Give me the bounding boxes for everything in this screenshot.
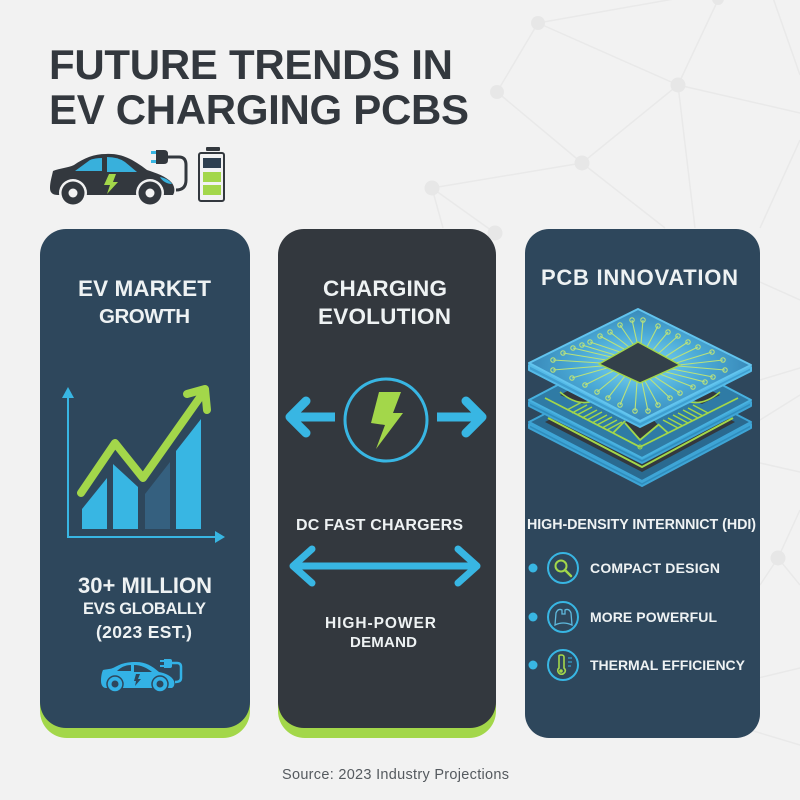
heading: PCB innovation: PCB INNOVATION xyxy=(541,265,738,290)
chip xyxy=(599,342,680,383)
heading: EV market growth xyxy=(78,276,211,328)
label: DC fast chargers: DC FAST CHARGERS xyxy=(296,517,463,534)
list item: thermal efficiency xyxy=(528,650,746,680)
statistic: 30+ million EVs: 30+ MILLION xyxy=(78,573,212,598)
statistic: 30+ million EVs xyxy=(78,573,212,642)
panel: EV market growth xyxy=(40,229,250,738)
label: high-power demand xyxy=(325,615,436,651)
top layer xyxy=(529,309,751,427)
label: HDI: HIGH-DENSITY INTERNNICT (HDI) xyxy=(527,517,756,533)
arrow: two-way xyxy=(293,549,477,583)
title: FUTURE TRENDS IN xyxy=(49,41,453,88)
panel: PCB innovation xyxy=(525,229,760,738)
bar chart: rising trend xyxy=(62,387,225,543)
icon: blue electric car xyxy=(101,659,181,692)
list item: more powerful xyxy=(528,602,717,632)
heading: EV market growth: GROWTH xyxy=(99,305,190,328)
heading: EV market growth: EV MARKET xyxy=(78,276,211,301)
label: high-power demand: HIGH-POWER xyxy=(325,615,436,632)
list item: compact design: COMPACT DESIGN xyxy=(590,560,720,576)
title: EV CHARGING PCBS xyxy=(49,86,469,133)
statistic: 30+ million EVs: EVS GLOBALLY xyxy=(83,600,206,618)
icon: lightning bolt with outward arrows xyxy=(290,379,482,461)
illustration: layered PCB stack xyxy=(529,309,751,486)
bottom layer xyxy=(529,365,751,486)
source note: Source: 2023 Industry Projections xyxy=(282,767,509,783)
traces xyxy=(551,318,727,413)
title xyxy=(49,41,469,133)
panel: charging evolution xyxy=(278,229,496,738)
label: high-power demand: DEMAND xyxy=(350,634,417,651)
heading: charging evolution: EVOLUTION xyxy=(318,304,451,329)
statistic: 30+ million EVs: (2023 EST.) xyxy=(96,622,192,642)
list item: compact design xyxy=(528,553,720,583)
middle layer xyxy=(529,342,751,463)
icon: car with plug and battery xyxy=(50,147,224,207)
list item: more powerful: MORE POWERFUL xyxy=(590,609,717,625)
heading: charging evolution xyxy=(318,276,451,329)
list item: thermal efficiency: THERMAL EFFICIENCY xyxy=(590,657,746,673)
heading: charging evolution: CHARGING xyxy=(323,276,447,301)
